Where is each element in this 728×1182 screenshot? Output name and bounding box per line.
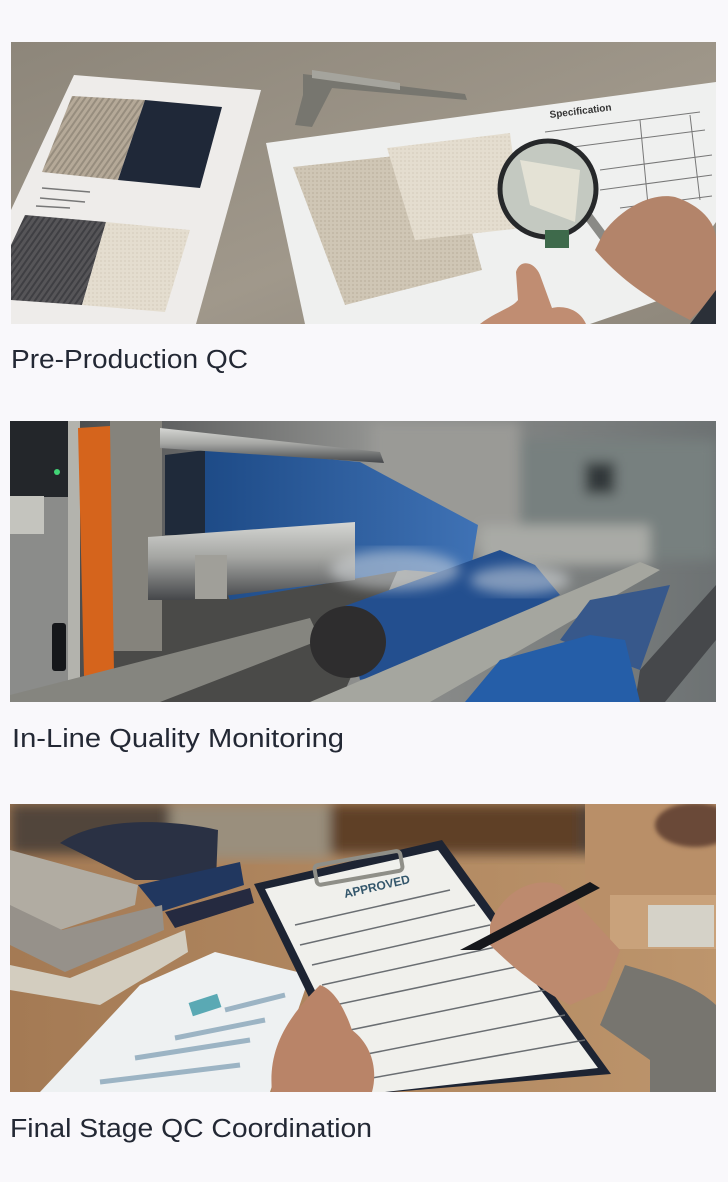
right conveyor and blue cloth bbox=[310, 562, 716, 702]
hands and pen bbox=[271, 882, 716, 1092]
caption: In-Line Quality Monitoring bbox=[12, 725, 344, 753]
clipboard with approved form bbox=[254, 840, 611, 1092]
rolled blue fabric bbox=[310, 550, 560, 680]
blurred factory background bbox=[370, 421, 716, 565]
left specification sheet with swatches bbox=[11, 75, 261, 324]
magnifying glass bbox=[500, 141, 606, 248]
photo: fabric swatches under magnifier bbox=[11, 42, 716, 324]
dark fabric shadow bbox=[165, 450, 205, 535]
caliper tool bbox=[295, 70, 467, 127]
steel rollers bbox=[148, 428, 384, 600]
photo: textile machine with blue fabric bbox=[10, 421, 716, 702]
caption: Final Stage QC Coordination bbox=[10, 1115, 372, 1143]
right specification sheet with swatches bbox=[266, 82, 716, 324]
hands bbox=[480, 196, 716, 324]
stacked fabric folds bbox=[10, 822, 254, 1005]
clipboard with approved form: APPROVED bbox=[343, 872, 412, 901]
photo: approved clipboard on a table bbox=[10, 803, 728, 1092]
cardboard boxes bbox=[585, 803, 728, 949]
machine frame and control panel bbox=[10, 421, 400, 702]
blue fabric sheet bbox=[200, 448, 478, 600]
steam bbox=[330, 550, 570, 594]
lower left conveyor rail bbox=[10, 618, 320, 702]
right specification sheet with swatches: Specification bbox=[549, 102, 612, 121]
blurred warehouse background bbox=[10, 804, 585, 863]
caption: Pre-Production QC bbox=[11, 346, 248, 374]
printed reports on table bbox=[40, 952, 310, 1092]
